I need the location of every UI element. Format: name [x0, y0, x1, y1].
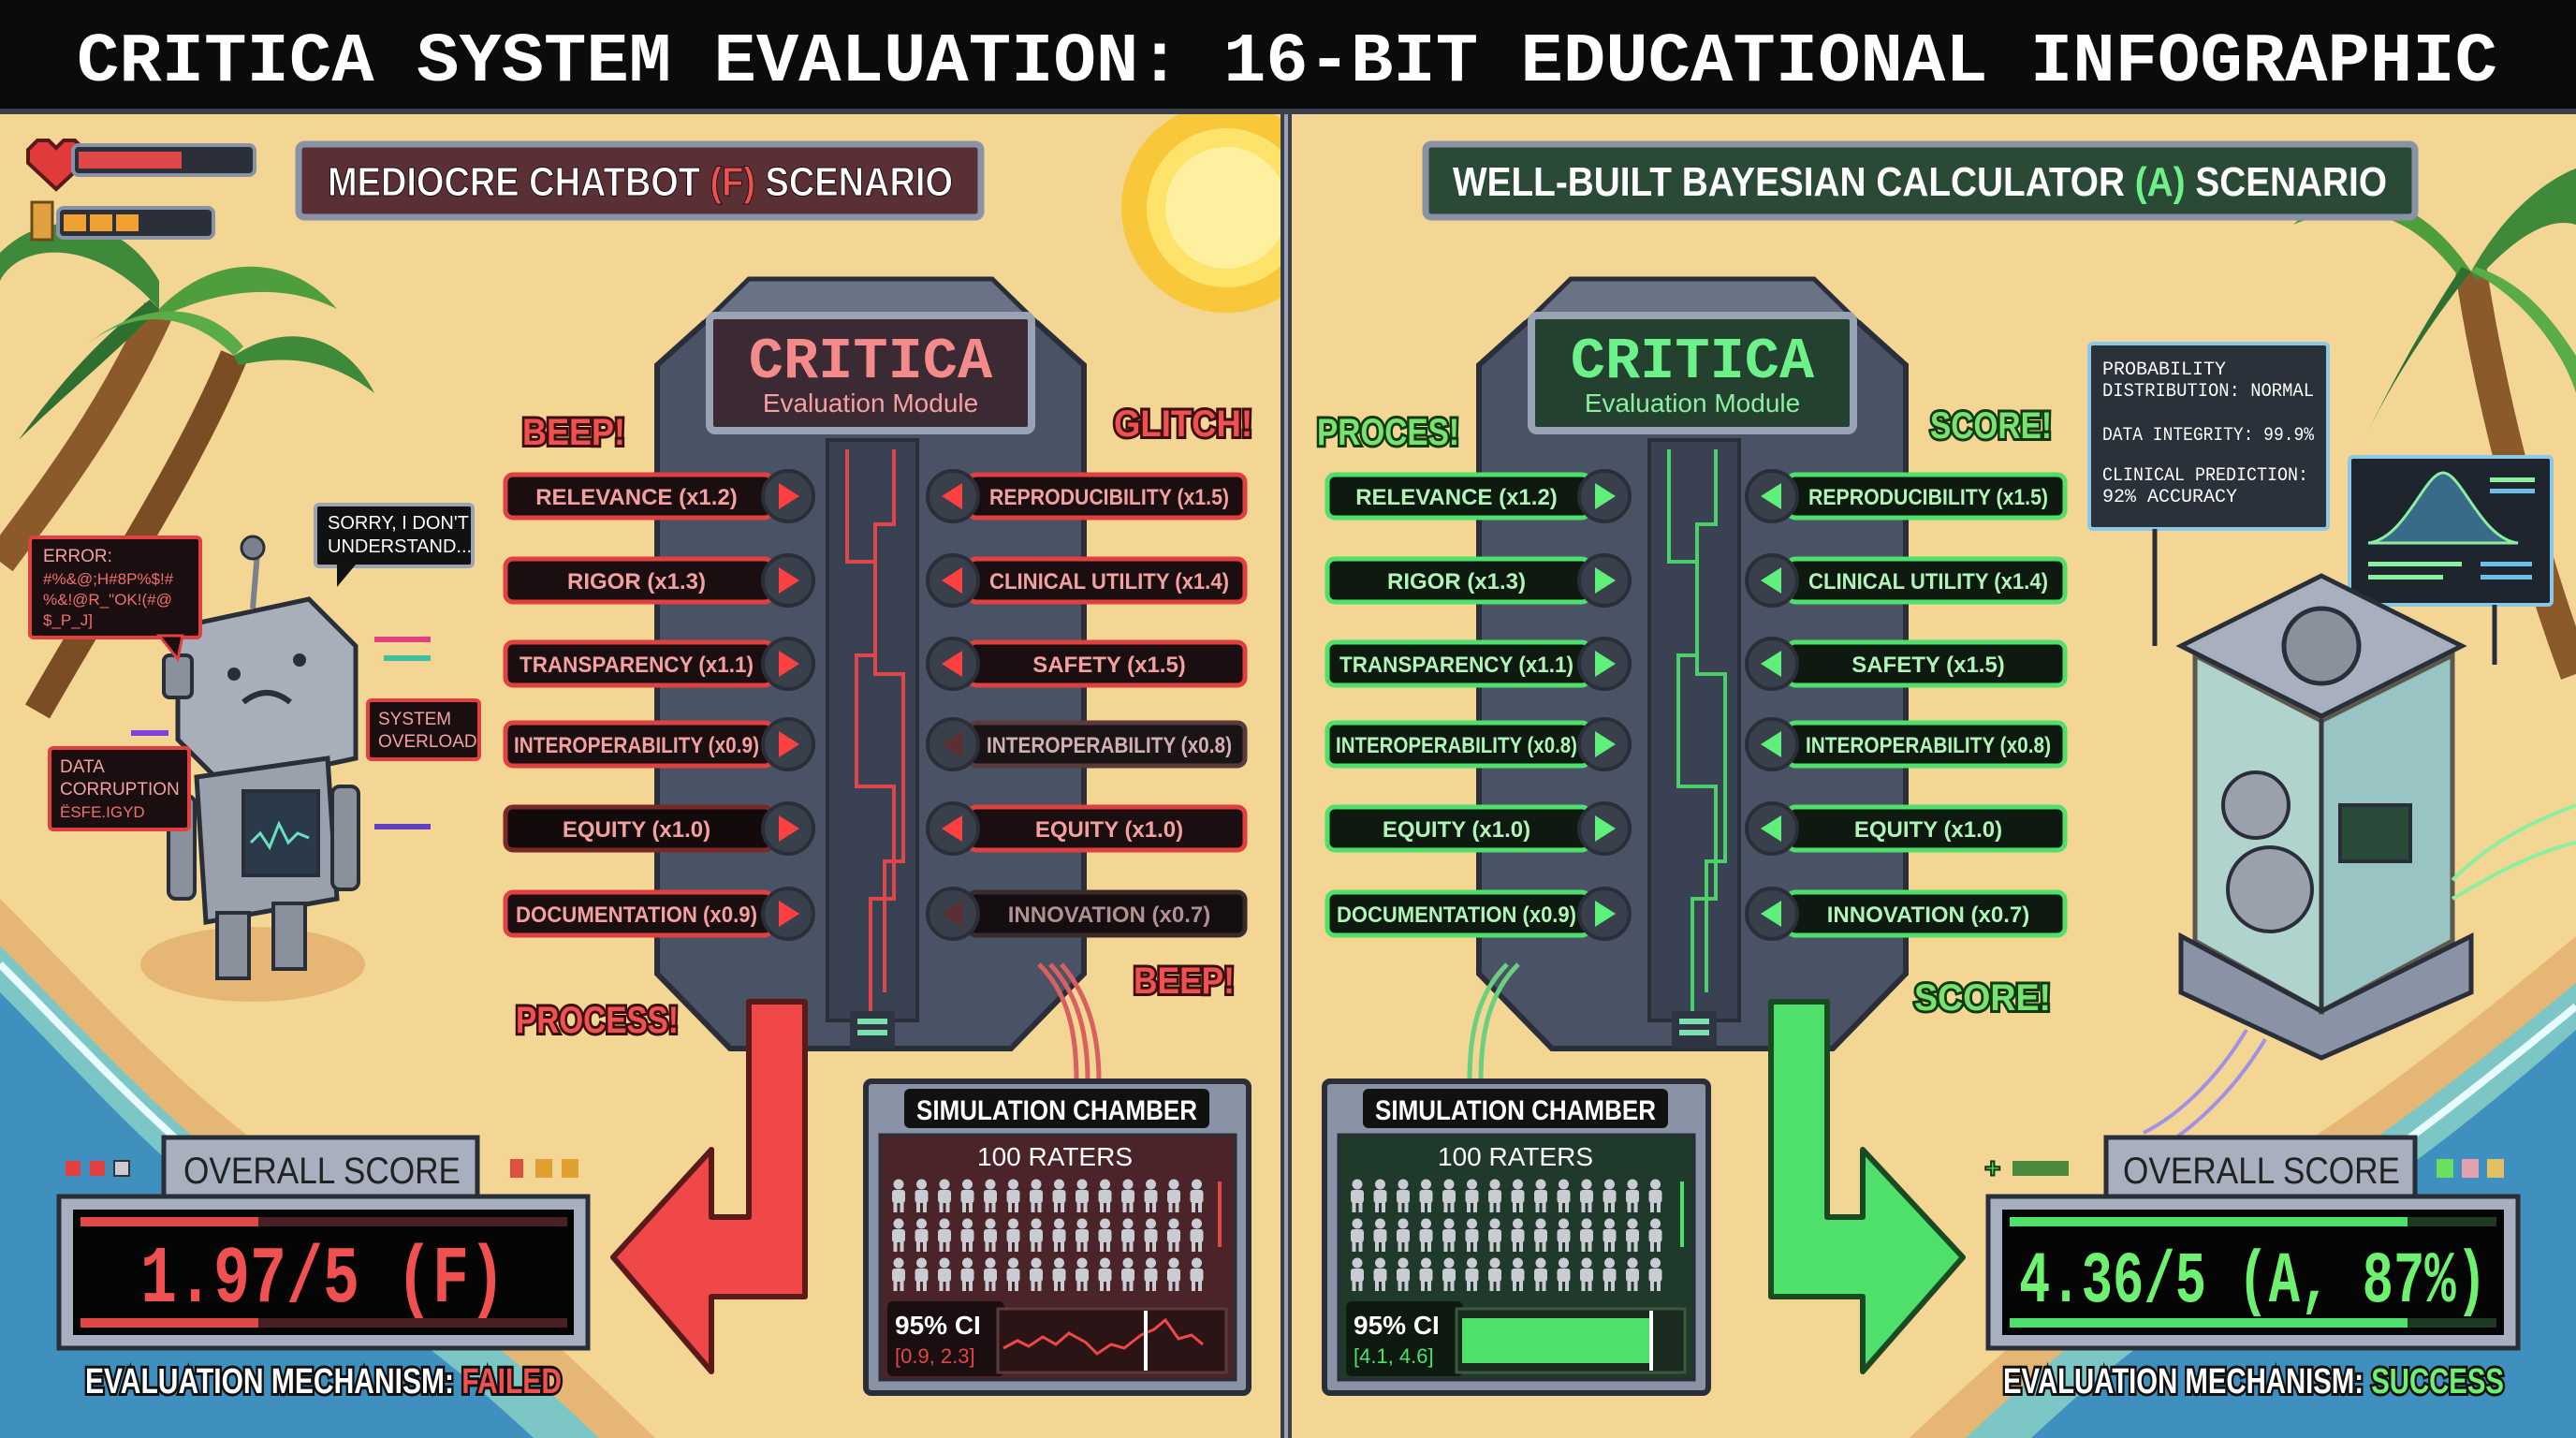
pill: transparency: TRANSPARENCY (x1.1)	[520, 653, 754, 678]
pill: interoperability green right: INTEROPERABILITY (x0.8)	[1806, 733, 2051, 758]
panel: simulation chamber right: [4.1, 4.6]	[1354, 1344, 1434, 1368]
pill: safety: SAFETY (x1.5)	[1032, 653, 1186, 678]
pill: equity green right	[1747, 803, 2065, 854]
tower screen left: CRITICA	[749, 329, 993, 395]
text: evaluation success: EVALUATION MECHANISM: SUCCESS	[2003, 1362, 2504, 1401]
panel: overall score left: 1.97/5 (F)	[140, 1234, 505, 1326]
pill: interoperability green right	[1747, 719, 2065, 770]
label: process: PROCESS!	[516, 1000, 679, 1041]
info box: probability: PROBABILITY	[2102, 360, 2226, 381]
info box: probability: DISTRIBUTION: NORMAL	[2102, 381, 2314, 403]
pill: interoperability right: INTEROPERABILITY (x0.8)	[987, 733, 1232, 758]
pill: clinical utility green: CLINICAL UTILITY (x1.4)	[1808, 569, 2048, 594]
pill: rigor green	[1327, 555, 1630, 606]
title bar	[0, 0, 2576, 114]
bubble: error: $_P_J]	[43, 611, 93, 629]
pill: documentation	[505, 888, 813, 939]
pill: reproducibility	[928, 471, 1245, 521]
ocean left	[0, 899, 655, 1438]
panel: overall score right: +	[1984, 1153, 2001, 1184]
info box: probability: 92% ACCURACY	[2102, 487, 2237, 508]
panel: simulation chamber right: 95% CI	[1354, 1311, 1440, 1340]
panel: simulation chamber right: 100 RATERS	[1438, 1142, 1593, 1171]
label: score: SCORE!	[1930, 405, 2052, 447]
bubble: sorry	[315, 505, 473, 587]
bubble: error: #%&@;H#8P%$!#	[43, 570, 174, 588]
bubble: sorry: SORRY, I DON'T	[328, 513, 469, 534]
pill: interoperability green	[1327, 719, 1630, 770]
pill: relevance: RELEVANCE (x1.2)	[535, 485, 738, 510]
pill: innovation green	[1747, 888, 2065, 939]
label: score bottom: SCORE!	[1914, 977, 2051, 1019]
panel: simulation chamber right: SIMULATION CHAMBER	[1375, 1095, 1656, 1126]
bubble: error: %&!@R_"OK!(#@	[43, 591, 172, 609]
pill: rigor green: RIGOR (x1.3)	[1387, 569, 1526, 594]
panel: overall score right: OVERALL SCORE	[2123, 1151, 2400, 1192]
cables	[1039, 964, 1099, 1081]
pill: equity green	[1327, 803, 1630, 854]
panel: overall score right	[1984, 1137, 2518, 1348]
sound effect labels	[516, 404, 2052, 1041]
tower screen left: Evaluation Module	[763, 389, 978, 418]
pill: documentation green	[1327, 888, 1630, 939]
pill: reproducibility green	[1747, 471, 2065, 521]
chart: rater grid left	[887, 1178, 1208, 1296]
chart: normal distribution	[2349, 457, 2552, 665]
pill: transparency green: TRANSPARENCY (x1.1)	[1339, 653, 1573, 678]
tower: left CRITICA module	[657, 279, 1084, 1049]
panel: simulation chamber left: SIMULATION CHAMBER	[916, 1095, 1197, 1126]
tower screen right: CRITICA	[1571, 329, 1815, 395]
pill: safety green	[1747, 638, 2065, 689]
label: glitch: GLITCH!	[1114, 404, 1252, 445]
arrow: red down-left	[613, 1002, 805, 1372]
pill: equity right	[928, 803, 1245, 854]
pill: clinical utility: CLINICAL UTILITY (x1.4)	[989, 569, 1229, 594]
pill: relevance green: RELEVANCE (x1.2)	[1355, 485, 1558, 510]
panel: simulation chamber left: 95% CI	[895, 1311, 981, 1340]
pill: interoperability	[505, 719, 813, 770]
header: right scenario: WELL-BUILT BAYESIAN CALCULATOR (A) SCENARIO	[1453, 159, 2387, 205]
pill: interoperability: INTEROPERABILITY (x0.9)	[514, 733, 759, 758]
pill: interoperability green: INTEROPERABILITY (x0.8)	[1336, 733, 1577, 758]
panel: overall score left	[59, 1137, 588, 1348]
bubble: data corruption	[50, 748, 189, 829]
health bars	[28, 140, 255, 240]
header: left scenario: MEDIOCRE CHATBOT (F) SCENARIO	[328, 159, 953, 205]
pill: interoperability right	[928, 719, 1245, 770]
pill: equity: EQUITY (x1.0)	[563, 817, 710, 843]
pill: safety green: SAFETY (x1.5)	[1852, 653, 2005, 678]
header: left scenario	[299, 144, 981, 217]
title bar: CRITICA SYSTEM EVALUATION: 16-BIT EDUCATIONAL INFOGRAPHIC	[77, 23, 2497, 102]
panel: simulation chamber left	[866, 1081, 1249, 1393]
pill: documentation green: DOCUMENTATION (x0.9)	[1337, 902, 1576, 928]
chart: rater grid right	[1346, 1178, 1667, 1296]
bubble: data corruption: CORRUPTION	[60, 780, 180, 800]
pill: rigor: RIGOR (x1.3)	[567, 569, 706, 594]
pill: transparency	[505, 638, 813, 689]
pill: safety	[928, 638, 1245, 689]
pills: right tower criteria	[1327, 471, 2065, 939]
bubble: system overload: SYSTEM	[378, 710, 451, 729]
icon: sun	[1121, 114, 1281, 313]
pill: equity green: EQUITY (x1.0)	[1383, 817, 1530, 843]
bubble: error	[30, 537, 200, 659]
label: proces green: PROCES!	[1317, 412, 1459, 453]
pill: equity right: EQUITY (x1.0)	[1035, 817, 1183, 843]
text: evaluation failed: EVALUATION MECHANISM: FAILED	[85, 1362, 562, 1401]
panel: simulation chamber left: [0.9, 2.3]	[895, 1344, 975, 1368]
robot: sad chatbot	[131, 536, 431, 1002]
info box: probability: CLINICAL PREDICTION:	[2102, 465, 2308, 487]
pill: relevance green	[1327, 471, 1630, 521]
pill: equity	[505, 803, 813, 854]
pill: clinical utility green	[1747, 555, 2065, 606]
tower screen left	[710, 315, 1032, 431]
pill: transparency green	[1327, 638, 1630, 689]
tower: right CRITICA module	[1479, 279, 1906, 1049]
pill: equity green right: EQUITY (x1.0)	[1854, 817, 2002, 843]
pill: innovation: INNOVATION (x0.7)	[1008, 902, 1210, 928]
pill: innovation	[928, 888, 1245, 939]
bubble: data corruption: ЁSFE.IGYD	[60, 803, 145, 821]
pills: left tower criteria	[505, 471, 1245, 939]
pill: documentation: DOCUMENTATION (x0.9)	[516, 902, 757, 928]
label: beep: BEEP!	[522, 412, 625, 453]
pill: reproducibility green: REPRODUCIBILITY (x1.5)	[1808, 485, 2048, 510]
icon: palm tree right	[2293, 169, 2576, 674]
pill: rigor	[505, 555, 813, 606]
info box: probability: DATA INTEGRITY: 99.9%	[2102, 425, 2315, 447]
panel: overall score left: OVERALL SCORE	[183, 1151, 461, 1192]
pill: relevance	[505, 471, 813, 521]
icon: palm tree left	[0, 224, 374, 712]
icon: bayesian machine	[2144, 576, 2576, 1147]
panel: simulation chamber left: 100 RATERS	[977, 1142, 1133, 1171]
arrow: green down-right	[1771, 1002, 1963, 1372]
info box: probability	[2089, 344, 2328, 646]
bubble: error: ERROR:	[43, 547, 112, 566]
bubble: system overload: OVERLOAD	[378, 732, 477, 752]
pill: innovation green: INNOVATION (x0.7)	[1827, 902, 2029, 928]
divider	[1281, 114, 1292, 1438]
pill: reproducibility: REPRODUCIBILITY (x1.5)	[989, 485, 1229, 510]
tower screen right: Evaluation Module	[1585, 389, 1800, 418]
panel: simulation chamber right	[1325, 1081, 1708, 1393]
header: right scenario	[1426, 144, 2415, 217]
bubble: data corruption: DATA	[60, 757, 105, 777]
pill: clinical utility	[928, 555, 1245, 606]
ocean right	[1910, 936, 2576, 1438]
bubble: system overload	[368, 700, 479, 759]
tower screen right	[1531, 315, 1853, 431]
label: beep bottom: BEEP!	[1134, 961, 1235, 1002]
bubble: sorry: UNDERSTAND...	[328, 536, 472, 557]
